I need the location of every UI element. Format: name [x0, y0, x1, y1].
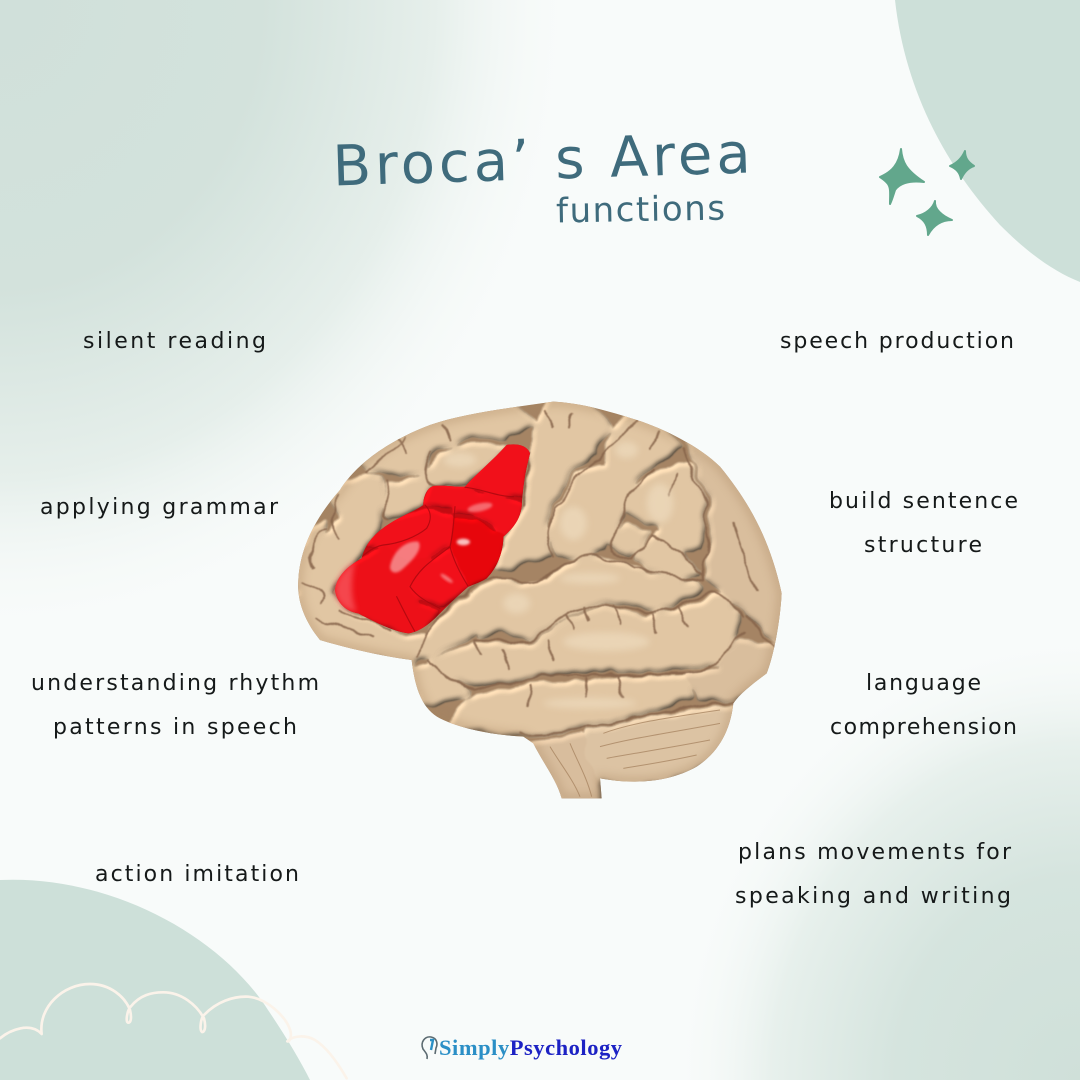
right label: language comprehension: comprehension	[830, 715, 1017, 740]
red region folds	[358, 487, 513, 632]
brain body	[298, 402, 782, 798]
left label: understanding rhythm patterns in speech: patterns in speech	[53, 715, 297, 740]
red region pink left lobe	[335, 562, 357, 612]
main sulci	[303, 410, 775, 733]
background tint: top-left	[0, 0, 580, 640]
background tint: bottom-right	[670, 630, 1080, 1080]
icon: sparkles	[880, 149, 974, 235]
right label: plans movements for speaking and writing	[735, 840, 1012, 909]
cerebellum folds	[550, 710, 720, 797]
logo icon: head	[422, 1037, 437, 1059]
red highlighted region	[332, 440, 532, 637]
right label: build sentence structure	[829, 489, 1018, 558]
red lobes	[332, 440, 532, 637]
logo wordmark: SimplyPsychology	[439, 1035, 623, 1060]
logo: Simply Psychology	[422, 1035, 623, 1060]
brain illustration	[293, 390, 790, 803]
gyri highlights	[443, 442, 673, 709]
right label: language comprehension	[830, 671, 1017, 740]
corner blob: top right	[895, 0, 1080, 282]
right label: build sentence structure: structure	[864, 533, 982, 558]
left label: silent reading: silent reading	[83, 329, 266, 354]
right label: speech production: speech production	[780, 329, 1014, 354]
decorative cloud line	[0, 984, 347, 1078]
red region highlights	[390, 501, 493, 584]
right label: plans movements for speaking and writing: plans movements for	[738, 840, 1012, 865]
right label: build sentence structure: build sentence	[829, 489, 1018, 514]
right label: language comprehension: language	[866, 671, 981, 696]
corner blob: bottom left	[0, 880, 310, 1080]
left label: action imitation: action imitation	[95, 862, 299, 887]
subtitle: functions	[556, 189, 725, 231]
left label: applying grammar: applying grammar	[40, 495, 279, 520]
title: Broca’ s Area	[332, 121, 751, 199]
left label: understanding rhythm patterns in speech	[31, 671, 319, 740]
gyri	[293, 390, 790, 803]
rim shading	[298, 402, 782, 798]
left label: understanding rhythm patterns in speech: understanding rhythm	[31, 671, 319, 696]
right label: plans movements for speaking and writing: speaking and writing	[735, 884, 1011, 909]
